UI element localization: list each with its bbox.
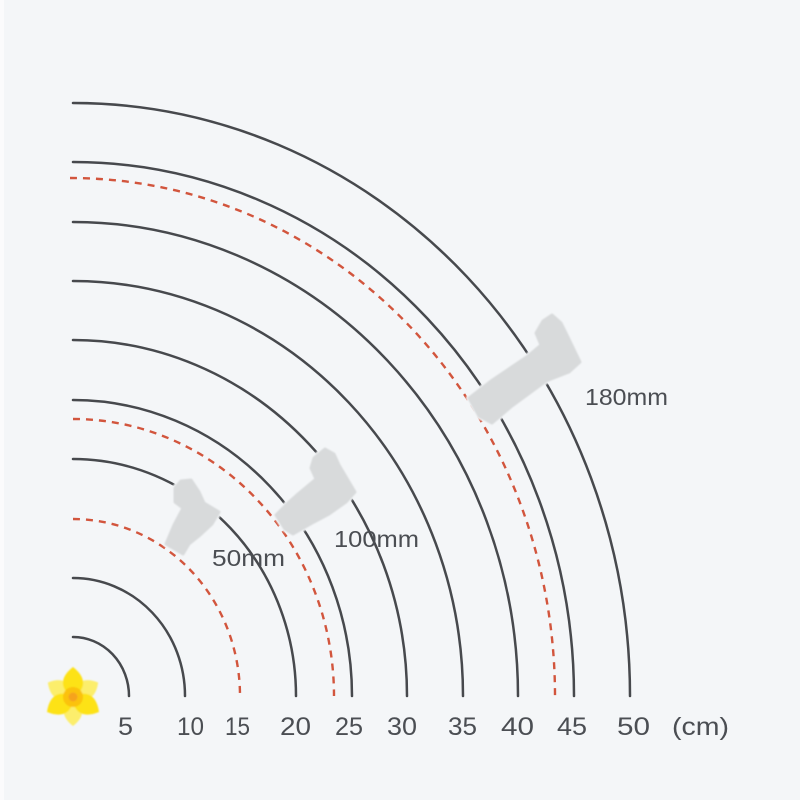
axis labels: distance in cm: 45 (557, 713, 587, 741)
camera: 100mm lens (276, 449, 355, 534)
label: 50mm: 50mm (212, 545, 285, 571)
axis labels: distance in cm: 30 (387, 713, 417, 741)
axis labels: distance in cm: 5 (118, 713, 133, 741)
focus limit arcs: dashed red lines (70, 178, 555, 696)
distance arcs: solid lines (73, 103, 630, 696)
axis labels: distance in cm: (cm) (672, 713, 729, 741)
camera: 50mm lens (166, 480, 219, 554)
axis labels: distance in cm: 10 (177, 713, 204, 741)
axis labels: distance in cm: 35 (448, 713, 477, 741)
axis labels: distance in cm: 15 (225, 713, 250, 741)
axis labels: distance in cm: 25 (335, 713, 363, 741)
label: 180mm: 180mm (585, 384, 668, 410)
camera: 180mm lens (469, 315, 580, 423)
axis labels: distance in cm: 40 (501, 713, 534, 741)
axis labels: distance in cm (118, 713, 729, 741)
axis labels: distance in cm: 50 (617, 713, 650, 741)
axis labels: distance in cm: 20 (280, 713, 311, 741)
label: 100mm: 100mm (334, 526, 419, 552)
icon: daffodil flower (42, 667, 104, 726)
